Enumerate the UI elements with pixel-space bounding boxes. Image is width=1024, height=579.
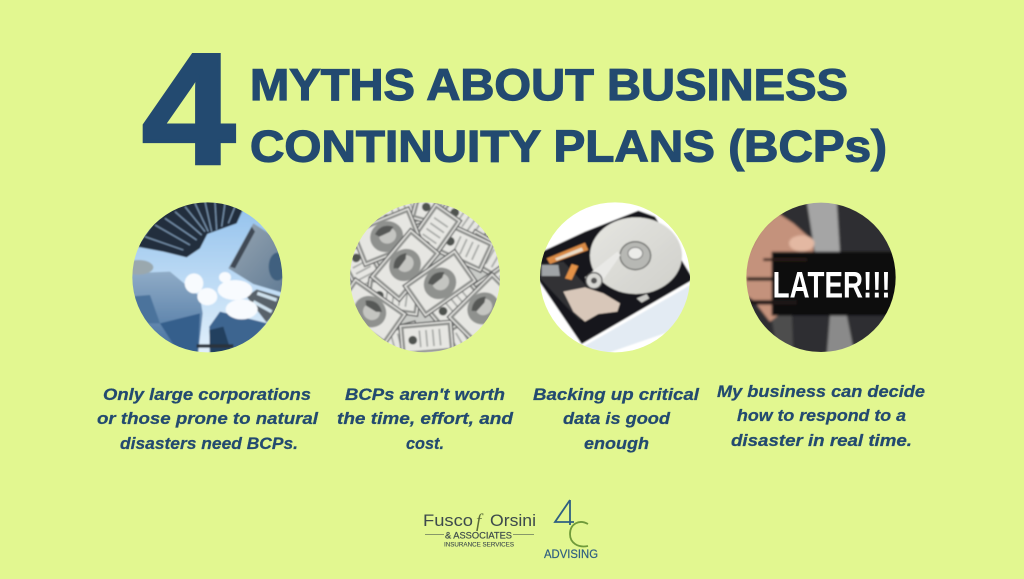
myth 4 caption: how to respond to a xyxy=(737,406,906,425)
myth 3 caption xyxy=(533,385,700,453)
myth 3 caption: Backing up critical xyxy=(533,385,700,404)
myth 1 caption: Only large corporations xyxy=(103,385,311,404)
logo: Fusco Orsini and Associates: f xyxy=(476,511,484,532)
myth 3 caption: enough xyxy=(584,434,649,453)
photo: open hard disk drive xyxy=(537,200,693,357)
logo: Fusco Orsini and Associates: Fusco xyxy=(423,512,473,530)
photo: pile of hundred dollar bills xyxy=(350,202,500,352)
title line 1: MYTHS ABOUT BUSINESS xyxy=(250,61,848,110)
logo: Fusco Orsini and Associates xyxy=(423,511,536,548)
big numeral 4: 4 xyxy=(142,22,235,197)
myth 3 caption: data is good xyxy=(563,409,671,428)
myth 2 caption: the time, effort, and xyxy=(337,409,514,428)
myth 2 caption: BCPs aren't worth xyxy=(345,385,505,404)
myth 2 caption: cost. xyxy=(406,434,444,453)
logo: Fusco Orsini and Associates: Orsini xyxy=(490,512,536,530)
myth 4 caption: disaster in real time. xyxy=(731,431,912,450)
myth 1 caption: or those prone to natural xyxy=(97,409,319,428)
logo: Fusco Orsini and Associates: & ASSOCIATES xyxy=(445,530,512,542)
logo: 4C Advising: ADVISING xyxy=(544,547,598,561)
photo text: LATER!!!: LATER!!! xyxy=(773,263,891,305)
myth 4 caption xyxy=(717,382,925,450)
photo: skyscrapers viewed from below xyxy=(132,202,282,352)
photo: hand writing LATER on a dark brush mark xyxy=(743,200,900,357)
title xyxy=(142,22,887,197)
myth 1 caption xyxy=(97,385,319,453)
logo: Fusco Orsini and Associates: INSURANCE SERVICES xyxy=(444,542,514,548)
title line 2: CONTINUITY PLANS (BCPs) xyxy=(250,122,887,172)
infographic xyxy=(97,53,925,558)
myth 2 caption xyxy=(337,385,514,453)
logo: 4C Advising xyxy=(544,500,598,561)
myth 4 caption: My business can decide xyxy=(717,382,925,401)
myth 1 caption: disasters need BCPs. xyxy=(120,434,298,453)
